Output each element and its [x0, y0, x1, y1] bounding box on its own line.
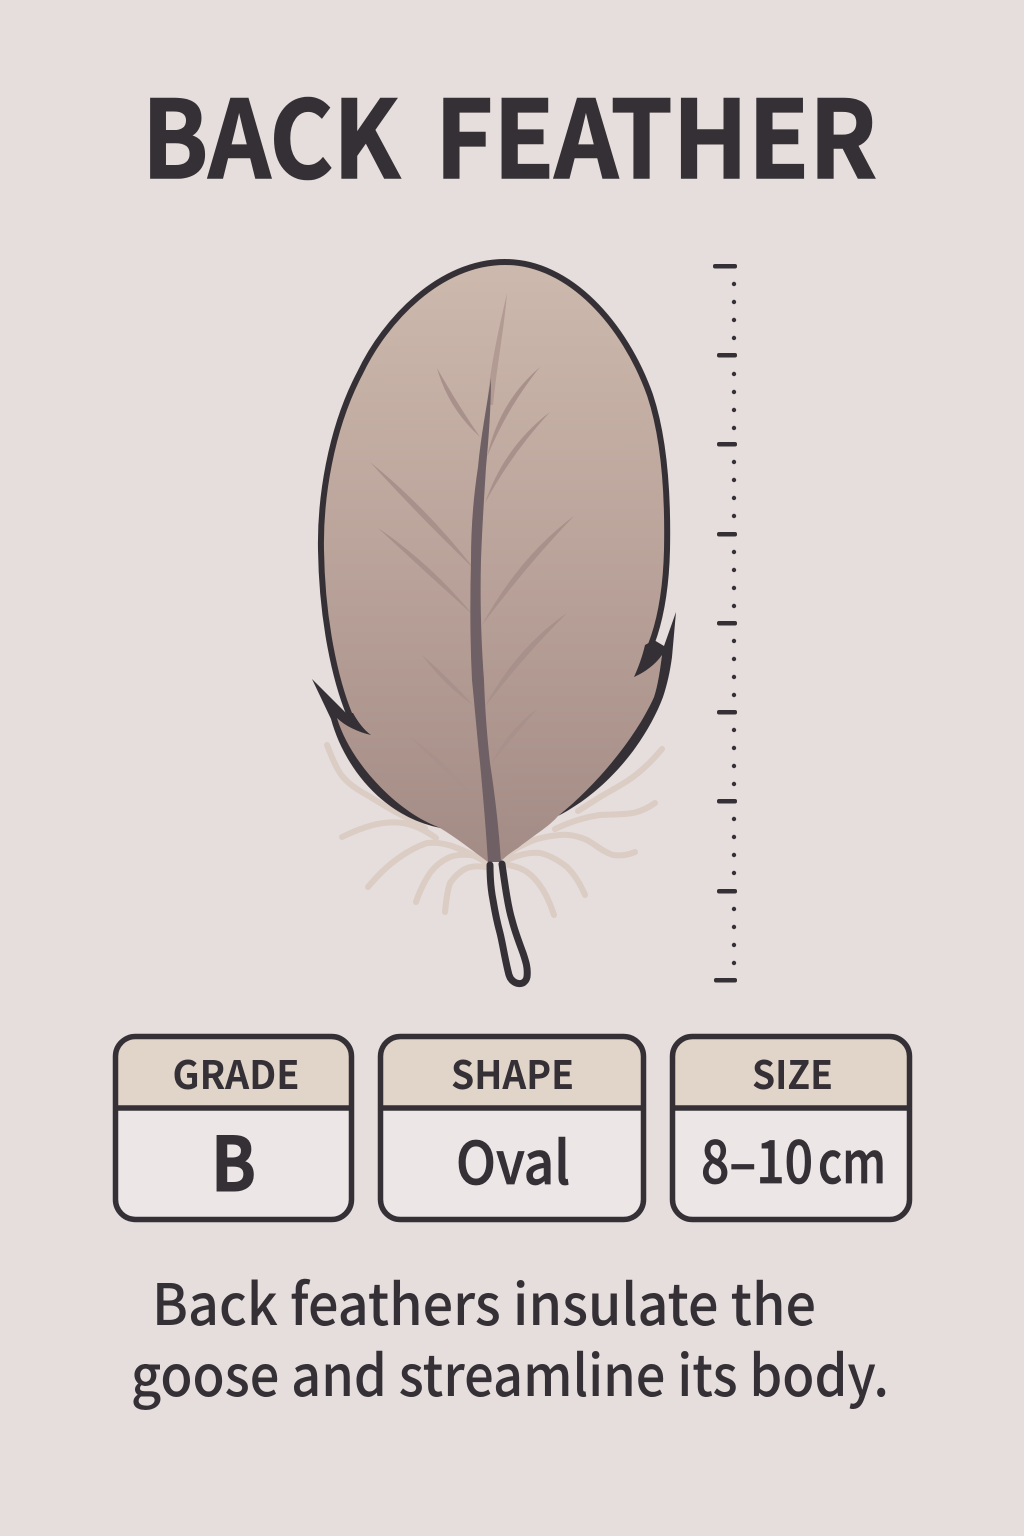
- downy barbs at the feather base: [327, 745, 662, 915]
- illustration: feather: [312, 262, 676, 984]
- card: grade: B: [211, 1104, 256, 1213]
- card: shape: [380, 1036, 644, 1220]
- feather vane fill: [321, 262, 667, 862]
- card: size: 8–10: [701, 1116, 813, 1200]
- card: shape: SHAPE: [451, 1045, 574, 1101]
- central shaft: [470, 293, 507, 862]
- title: [142, 54, 877, 209]
- quill: [490, 864, 527, 984]
- card: grade: [116, 1036, 352, 1220]
- card: size: [672, 1036, 910, 1220]
- card: grade: GRADE: [172, 1045, 300, 1101]
- size ruler: [713, 264, 737, 982]
- feather outline: [312, 262, 676, 828]
- side barbs: [370, 367, 574, 805]
- description: goose and streamline its body.: [131, 1331, 889, 1413]
- right barb notch: [558, 612, 676, 816]
- left barb notch: [312, 679, 441, 828]
- card: shape: Oval: [456, 1116, 570, 1201]
- description: [131, 1260, 889, 1413]
- card: size: SIZE: [752, 1045, 833, 1101]
- title: FEATHER: [435, 54, 877, 209]
- card: size: cm: [818, 1116, 886, 1200]
- description: Back feathers insulate the: [152, 1260, 816, 1342]
- title: BACK: [142, 54, 401, 209]
